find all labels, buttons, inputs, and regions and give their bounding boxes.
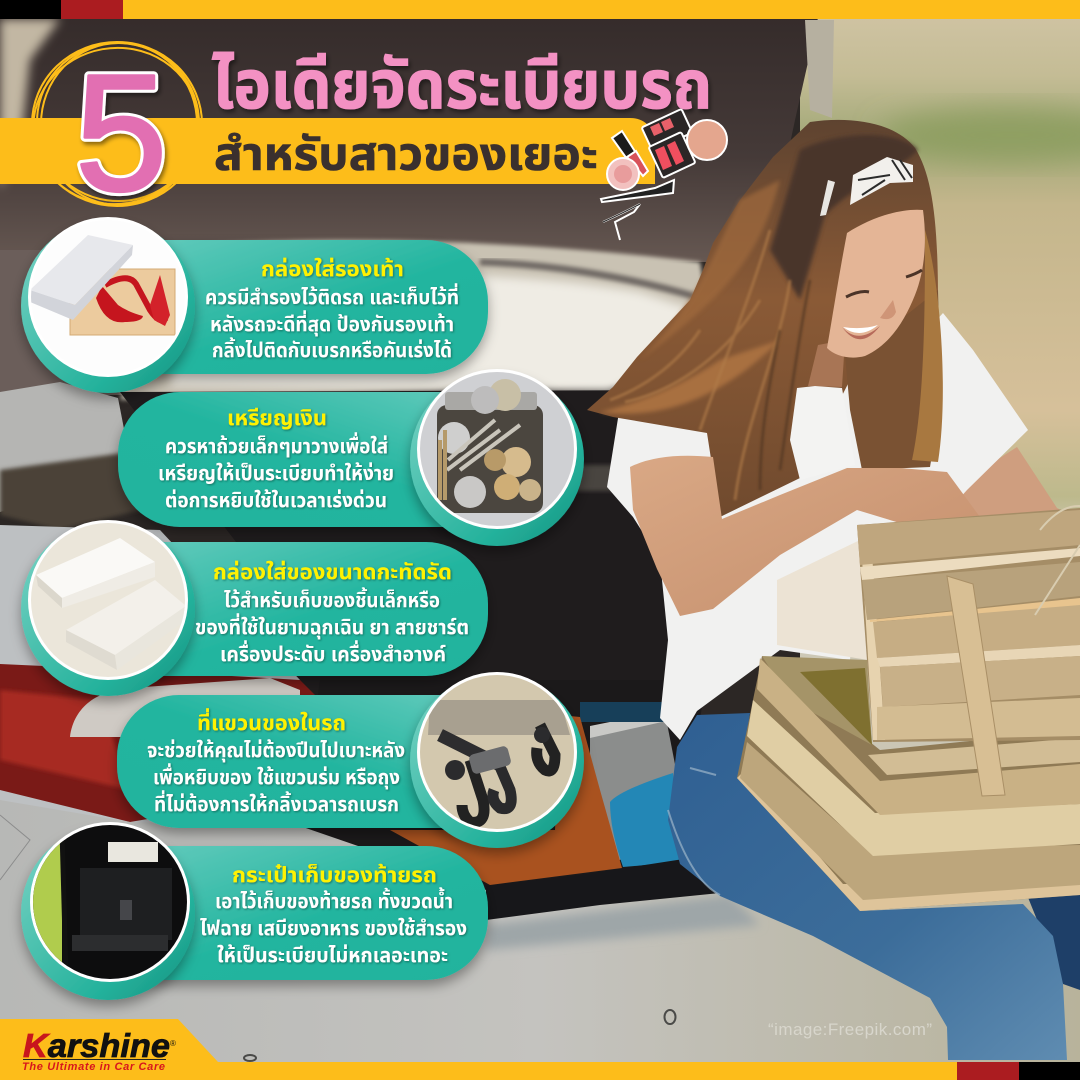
panel 5: trunk bag [21,820,488,1000]
photo: woman with wooden crates [587,120,1080,1060]
panel 3 heading: กล่องใส่ของขนาดกะทัดรัด [213,561,452,584]
panel 4 body: ที่ไม่ต้องการให้กลิ้งเวลารถเบรก [154,790,399,816]
panel 4: hangers [117,670,584,848]
panel 2 body: เหรียญให้เป็นระเบียบทำให้ง่าย [158,462,394,485]
panel 2 heading: เหรียญเงิน [227,407,327,430]
hair back [587,120,938,517]
panel 5 heading: กระเป๋าเก็บของท้ายรถ [232,864,437,887]
panel 2 body [158,432,394,512]
panel 2: coins [118,369,584,546]
pill [100,542,488,676]
pill [118,392,518,527]
image: black trunk organiser [33,825,187,979]
panel 3 body [195,587,469,666]
teal circle [410,372,584,546]
crate lid slats [857,506,1080,796]
headband [850,157,913,205]
panel 2 body: ควรหาถ้วยเล็กๆมาวางเพื่อใส่ [165,432,388,458]
pill [100,846,488,980]
trunk rim [120,240,720,400]
teal circle [410,674,584,848]
panel 5 body: เอาไว้เก็บของท้ายรถ ทั้งขวดน้ำ [215,887,453,913]
jeans [668,713,1067,1060]
shirt neckline [790,386,855,480]
scribbled circle behind number 5 [21,32,211,217]
teal circle [21,826,195,1000]
top colour band [0,0,1080,19]
dark interior [120,390,735,720]
left arm and hand [630,456,985,616]
crate bag liner [777,540,868,660]
white ring [417,369,577,529]
neck [808,340,845,387]
big number 5: 5 [75,41,167,226]
rear leg [1027,890,1080,990]
orange bag [390,715,622,885]
rear window [0,382,132,512]
logo: Karshine: ® [170,1039,176,1048]
panel 1 body [205,283,459,362]
teal circle [21,219,195,393]
image: white boxes [31,523,185,677]
panel 4 body [147,740,405,816]
panel 1 heading: กล่องใส่รองเท้า [261,258,404,281]
panel 5 body: ไฟฉาย เสบียงอาหาร ของใช้สำรอง [200,918,467,940]
panel 1 body: ควรมีสำรองไว้ติดรถ และเก็บไว้ที่ [205,283,459,309]
panel 5 body: ให้เป็นระเบียบไม่หกเลอะเทอะ [217,944,448,967]
white ring [30,822,190,982]
image: car seat hooks [420,675,574,829]
panel 2 body: ต่อการหยิบใช้ในเวลาเร่งด่วน [165,490,387,512]
panel 1 body: กลิ้งไปติดกับเบรกหรือคันเร่งได้ [212,337,452,362]
silver panel [0,525,320,860]
panel 4 heading: ที่แขวนของในรถ [197,708,346,735]
tail light [0,664,320,822]
panel 4 body: จะช่วยให้คุณไม่ต้องปีนไปเบาะหลัง [147,740,405,762]
image: red heels in box [31,235,176,336]
panel 1 body: หลังรถจะดีที่สุด ป้องกันรองเท้า [210,310,454,336]
lower car body [0,800,1080,1062]
panel 1: shoe box [20,210,488,393]
white ring [417,672,577,832]
logo: Karshine: Karshine [23,1027,170,1064]
blue jug [610,773,680,867]
t-shirt [607,313,1028,740]
subtitle: สำหรับสาวของเยอะ [214,128,598,180]
panel 3: small boxes [20,515,488,696]
yellow subtitle band [0,118,655,184]
image: coin jar [420,372,574,526]
white ring [28,520,188,680]
pill [117,695,517,828]
title: ไอเดียจัดระเบียบรถ [212,47,712,123]
ledge [590,713,680,860]
panel 5 body [200,887,467,967]
icon: makeup set [601,109,727,240]
image credit: “image:Freepik.com” [768,1020,932,1039]
white ring [28,217,188,377]
lower crate [737,656,1080,911]
teal circle [21,522,195,696]
panel 4 body: เพื่อหยิบของ ใช้แขวนร่ม หรือถุง [153,763,400,789]
panel 3 body: ของที่ใช้ในยามฉุกเฉิน ยา สายชาร์ต [195,613,469,639]
panel 3 body: เครื่องประดับ เครื่องสำอางค์ [220,640,446,666]
big number 5: 5 [75,41,167,226]
face [827,210,925,358]
black bumper slot [486,858,720,920]
right hair strand [845,290,941,470]
logo: Karshine: The Ultimate in Car Care [22,1061,165,1073]
panel 3 body: ไว้สำหรับเก็บของชิ้นเล็กหรือ [224,587,440,612]
bottom colour band and logo tab [0,1019,1080,1080]
pill [100,240,488,374]
right arm [950,447,1080,540]
